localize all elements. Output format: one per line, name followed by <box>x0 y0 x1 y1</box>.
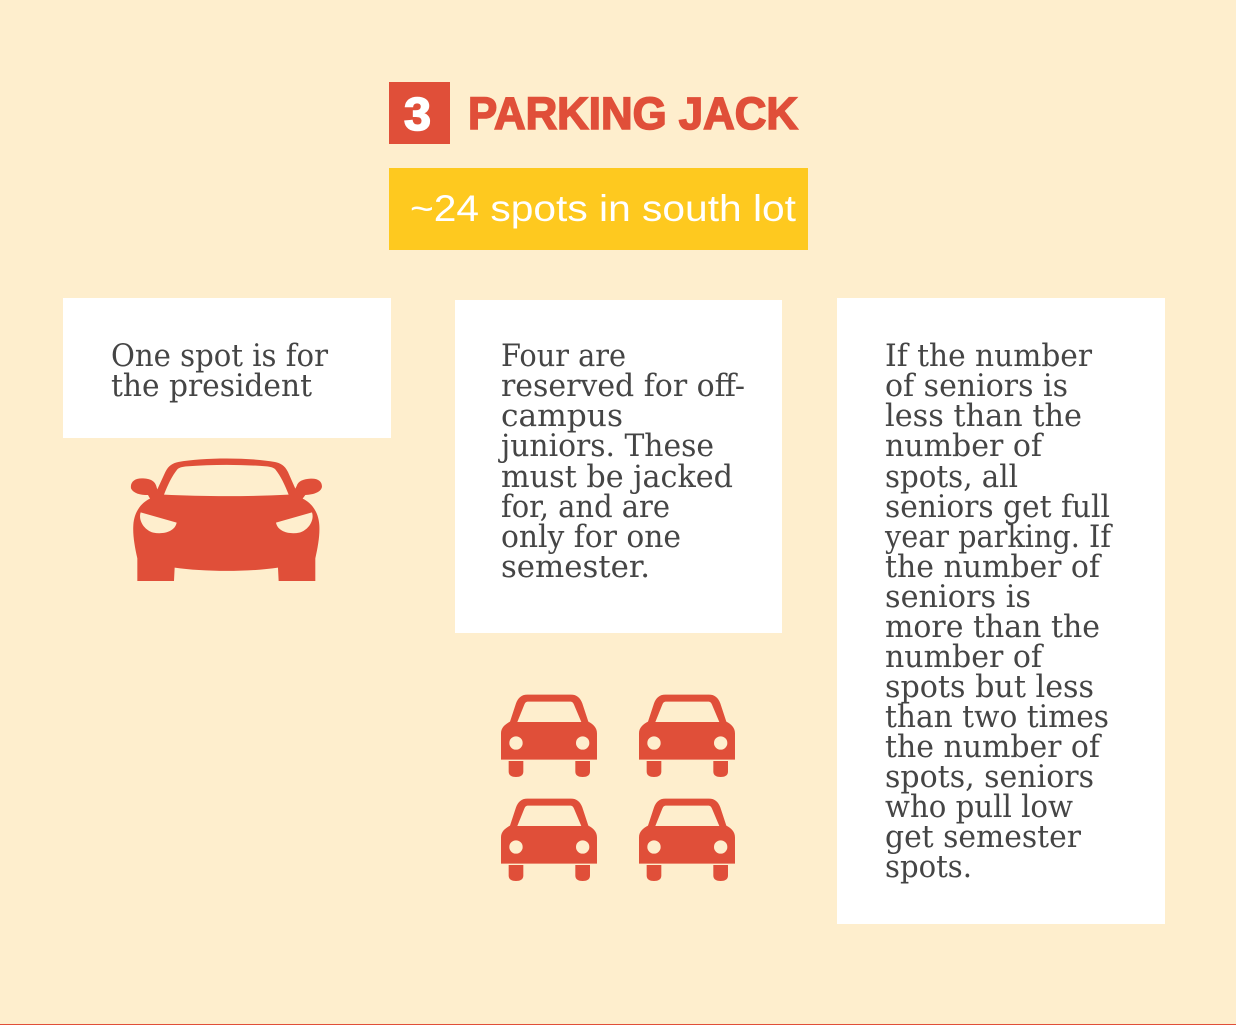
panel: senior parking rules: spots, seniors <box>885 759 1094 795</box>
panel: senior parking rules: than two times <box>885 699 1109 735</box>
panel: senior parking rules: number of <box>885 639 1044 675</box>
number badge <box>389 82 450 144</box>
panel: off-campus juniors <box>455 300 782 633</box>
panel: senior parking rules: number of <box>885 428 1044 464</box>
panel: president spot: One spot is for <box>111 338 328 374</box>
panel: senior parking rules: of seniors is <box>885 368 1068 404</box>
panel: senior parking rules: more than the <box>885 609 1100 645</box>
icon: small car 3 <box>501 799 597 881</box>
title: PARKING JACK <box>468 88 798 139</box>
panel: off-campus juniors: must be jacked <box>501 459 733 495</box>
panel: president spot: the president <box>111 368 313 404</box>
icon: small car 1 <box>501 695 597 777</box>
panel: senior parking rules <box>837 298 1165 924</box>
panel: off-campus juniors: Four are <box>501 338 626 374</box>
icon: large car front <box>131 458 322 581</box>
panel: senior parking rules: seniors get full <box>885 489 1110 525</box>
panel: off-campus juniors: reserved for off- <box>501 368 745 404</box>
icon: four small cars <box>501 695 735 881</box>
panel: off-campus juniors: campus <box>501 398 623 434</box>
panel: senior parking rules: less than the <box>885 398 1082 434</box>
panel: senior parking rules: seniors is <box>885 579 1031 615</box>
panel: off-campus juniors: juniors. These <box>498 428 714 464</box>
icon: small car 4 <box>639 799 735 881</box>
panel: senior parking rules: spots. <box>885 849 972 885</box>
panel: senior parking rules: the number of <box>885 729 1102 765</box>
panel: senior parking rules: spots but less <box>885 669 1094 705</box>
panel: senior parking rules: get semester <box>885 819 1081 855</box>
panel: senior parking rules: spots, all <box>885 459 1018 495</box>
panel: senior parking rules: If the number <box>885 338 1092 374</box>
subtitle banner: ~24 spots in south lot <box>410 188 797 229</box>
panel: senior parking rules: the number of <box>885 549 1102 585</box>
panel: senior parking rules: who pull low <box>885 789 1073 825</box>
panel: off-campus juniors: only for one <box>501 519 681 555</box>
subtitle banner <box>389 168 808 250</box>
panel: president spot <box>63 298 391 438</box>
icon: small car 2 <box>639 695 735 777</box>
panel: senior parking rules: year parking. If <box>884 519 1113 555</box>
panel: off-campus juniors: for, and are <box>501 489 670 525</box>
panel: off-campus juniors: semester. <box>501 549 650 585</box>
number badge: 3 <box>404 88 431 140</box>
